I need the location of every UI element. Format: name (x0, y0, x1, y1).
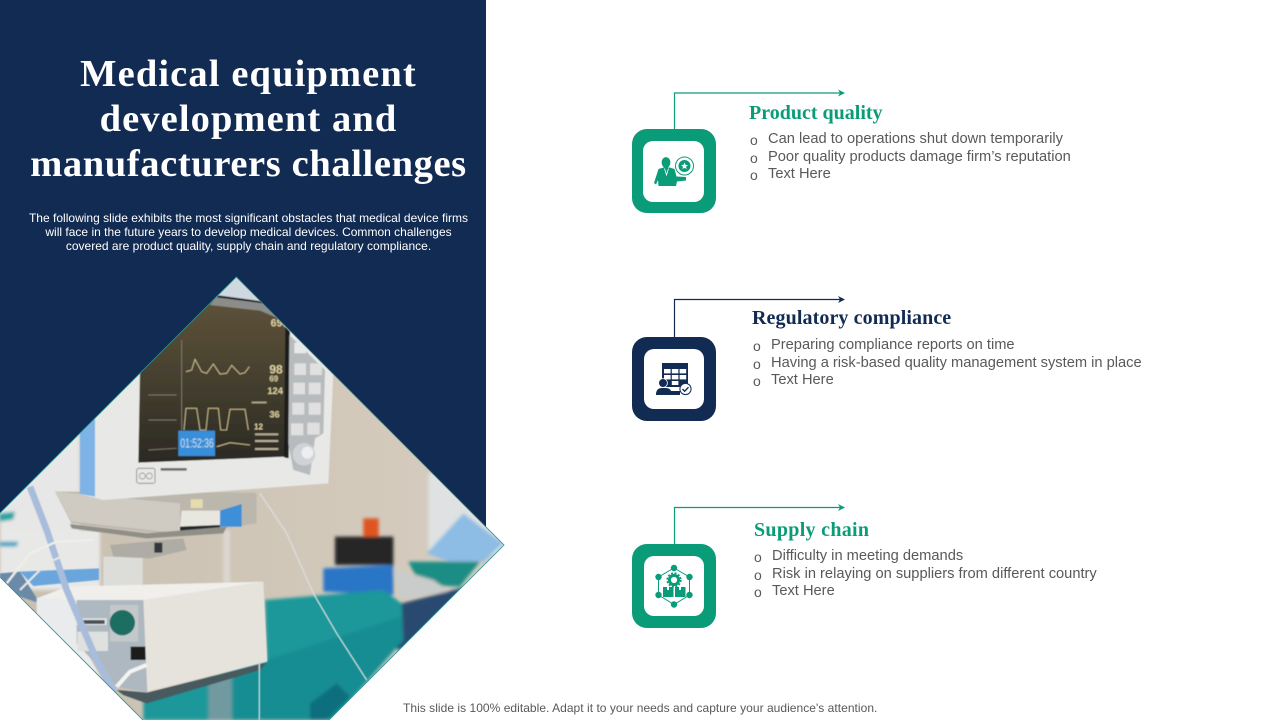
bullet list: regulatory compliance: Preparing compliance reports on time (771, 337, 1015, 353)
heading: regulatory compliance: Regulatory compliance (752, 307, 951, 329)
description text: will face in the future years to develop medical devices. Common challenges (45, 225, 452, 239)
heading: supply chain: Supply chain (754, 519, 869, 541)
tube and cables (30, 487, 115, 693)
photo: medical monitor in diamond frame: 69 (271, 318, 283, 330)
bullet list: regulatory compliance: Having a risk-based quality management system in place (771, 355, 1142, 371)
photo: medical monitor in diamond frame: 69 (269, 375, 279, 384)
blue tray left (20, 568, 99, 586)
bullet list: product quality: o (750, 132, 758, 148)
photo: medical monitor in diamond frame: 124 (267, 386, 284, 396)
monitor body (80, 293, 333, 500)
bullet list: regulatory compliance: Text Here (771, 372, 834, 388)
bullet list: product quality: o (750, 150, 758, 166)
icon: product quality person with gauge (632, 129, 716, 213)
bullet list: supply chain (754, 548, 1097, 600)
logo on bezel (137, 468, 155, 483)
monitor keys (294, 343, 306, 353)
title: manufacturers challenges (30, 143, 467, 185)
bullet list: supply chain: Text Here (772, 583, 835, 599)
bullet list: product quality: o (750, 167, 758, 183)
photo: medical monitor in diamond frame: 12 (254, 422, 263, 431)
bullet list: product quality (750, 131, 1071, 183)
bullet list: product quality: Can lead to operations shut down temporarily (768, 131, 1063, 147)
panel: navy left background (0, 0, 486, 545)
description text: The following slide exhibits the most significant obstacles that medical device firms (29, 211, 468, 225)
bullet list: supply chain: o (754, 584, 762, 600)
heading: product quality: Product quality (749, 102, 883, 124)
description text (29, 211, 468, 253)
title (30, 53, 467, 185)
bullet list: supply chain: Difficulty in meeting demands (772, 548, 963, 564)
icon: supply chain network with gear and boxes (632, 544, 716, 628)
arrow: product quality connector (674, 90, 845, 129)
icon: regulatory compliance table and person (632, 337, 716, 421)
footer note: This slide is 100% editable. Adapt it to your needs and capture your audience's attention. (403, 701, 877, 715)
bullet list: regulatory compliance: o (753, 356, 761, 372)
photo: medical monitor in diamond frame: 01:52:36 (180, 436, 214, 450)
title: development and (100, 98, 397, 140)
bullet list: supply chain: o (754, 549, 762, 565)
bullet list: supply chain: Risk in relaying on suppliers from different country (772, 566, 1097, 582)
bullet list: regulatory compliance: o (753, 373, 761, 389)
bullet list: product quality: Text Here (768, 166, 831, 182)
screen traces (184, 359, 250, 447)
photo: medical monitor in diamond frame (0, 276, 504, 720)
bullet list: product quality: Poor quality products damage firm’s reputation (768, 149, 1071, 165)
bullet list: regulatory compliance (753, 337, 1142, 389)
description text: covered are product quality, supply chain and regulatory compliance. (66, 239, 431, 253)
bullet list: regulatory compliance: o (753, 338, 761, 354)
arm under monitor (55, 492, 257, 535)
column (103, 557, 143, 587)
arrow: supply chain connector (674, 504, 845, 544)
photo: medical monitor in diamond frame: 36 (269, 409, 280, 419)
title: Medical equipment (80, 53, 417, 95)
lower box panel (37, 598, 113, 700)
bullet list: supply chain: o (754, 567, 762, 583)
photo: medical monitor in diamond frame: 98 (269, 362, 283, 376)
arrow: regulatory compliance connector (674, 296, 845, 337)
